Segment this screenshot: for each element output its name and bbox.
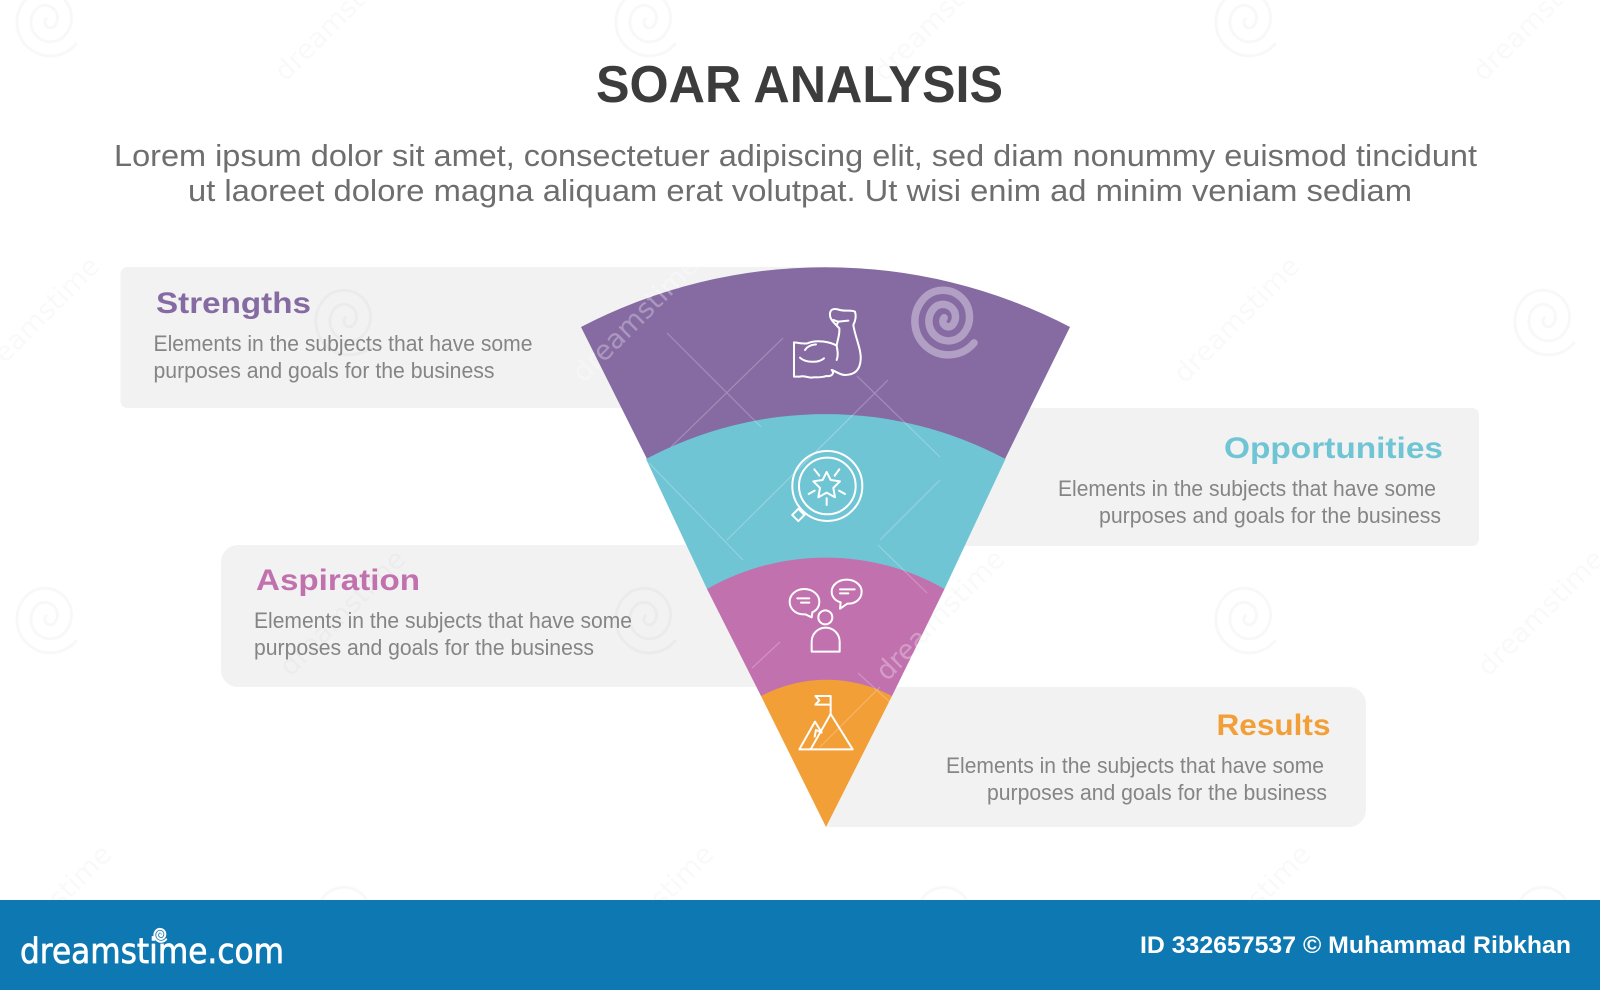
- watermark pattern: dreamstime: [1179, 839, 1317, 977]
- text block: strengths: purposes and goals for the business: [154, 358, 494, 383]
- text block: strengths: Strengths: [156, 287, 311, 320]
- text block: aspiration: Elements in the subjects that have some: [254, 608, 632, 633]
- icon: mountain with flag: [799, 696, 853, 749]
- icon: flexed arm: [794, 309, 861, 378]
- footer logo: dreamstime.com: [20, 932, 284, 972]
- panel: opportunities background: [900, 408, 1479, 546]
- panel: aspiration background: [221, 545, 821, 687]
- text block: aspiration: Aspiration: [256, 564, 420, 597]
- watermark pattern: dreamstime: [873, 544, 1011, 682]
- intro text: Lorem ipsum dolor sit amet, consectetuer adipiscing elit, sed diam nonummy euismod tincidunt: [114, 138, 1477, 173]
- footer credit: ID 332657537 © Muhammad Ribkhan: [1140, 932, 1571, 959]
- text block: opportunities: [1058, 432, 1443, 528]
- footer banner: [0, 900, 1600, 990]
- text block: results: [946, 709, 1330, 805]
- text block: aspiration: [254, 564, 632, 660]
- text block: opportunities: Opportunities: [1224, 432, 1443, 465]
- watermark pattern: dreamstime: [1168, 251, 1306, 389]
- watermark lines and marks on fan: [567, 250, 991, 747]
- text block: strengths: [154, 287, 532, 383]
- segment: opportunities: [646, 414, 1006, 589]
- panel: strengths background: [120, 267, 826, 408]
- icon: person with speech bubbles: [790, 580, 862, 652]
- panel: results background: [826, 687, 1366, 827]
- watermark lines and marks on fan: drea: [870, 623, 934, 687]
- title: SOAR ANALYSIS: [596, 56, 1003, 114]
- text block: opportunities: purposes and goals for the business: [1099, 503, 1441, 528]
- segment: results: [761, 680, 892, 827]
- text block: results: Elements in the subjects that have some: [946, 753, 1324, 778]
- watermark lines and marks on fan: dreamstime: [567, 250, 705, 388]
- intro text: [114, 138, 1477, 208]
- segment: aspiration: [707, 558, 944, 696]
- chart: inverted fan funnel: [581, 267, 1070, 827]
- text block: results: purposes and goals for the business: [987, 780, 1327, 805]
- icon: star in circle: [792, 451, 862, 521]
- text block: results: Results: [1216, 709, 1330, 742]
- watermark pattern: dreamstime: [274, 544, 412, 682]
- text block: strengths: Elements in the subjects that have some: [154, 331, 532, 356]
- segment: strengths: [581, 267, 1070, 459]
- text block: opportunities: Elements in the subjects that have some: [1058, 476, 1436, 501]
- text block: aspiration: purposes and goals for the business: [254, 635, 594, 660]
- watermark pattern: dreamstime: [582, 839, 720, 977]
- intro text: ut laoreet dolore magna aliquam erat volutpat. Ut wisi enim ad minim veniam sediam: [188, 173, 1412, 208]
